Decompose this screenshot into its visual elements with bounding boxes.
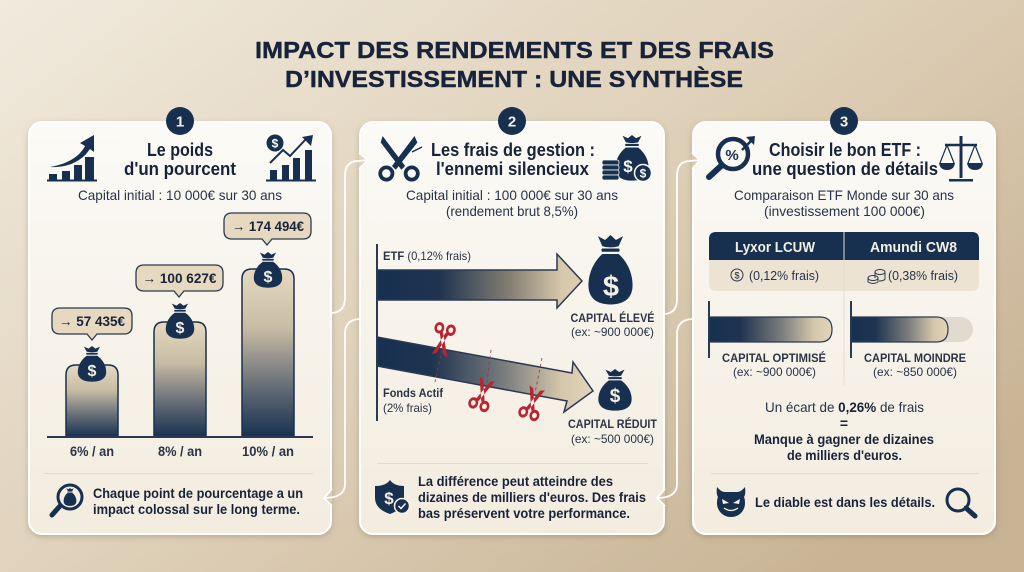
icon: money bag 6%: $ [88, 363, 97, 380]
subtitle: Comparaison ETF Monde sur 30 ans [734, 187, 954, 203]
heading [431, 140, 595, 179]
ETF result: (ex: ~900 000€) [571, 325, 654, 339]
bar 10% [242, 269, 294, 437]
subtitle [406, 187, 618, 219]
fonds actif result: (ex: ~500 000€) [571, 432, 654, 446]
heading: Les frais de gestion : [431, 140, 595, 160]
bar: capital moindre: CAPITAL MOINDRE [864, 351, 966, 365]
icon: money bag 6% [78, 346, 106, 382]
takeaway text: impact colossal sur le long terme. [93, 502, 300, 517]
callout 57 435: → 57 435€ [59, 313, 125, 329]
Fonds Actif label: Fonds Actif [383, 386, 444, 400]
bar: capital moindre: (ex: ~850 000€) [873, 365, 957, 379]
callout 100 627 [136, 265, 223, 297]
panel: le poids d'un pourcent [29, 107, 331, 534]
takeaway text: La différence peut atteindre des [418, 474, 613, 489]
connector: panel 2 bottom to panel 3 [657, 319, 692, 498]
takeaway text: bas préservent votre performance. [418, 506, 630, 521]
connector arrows between panels [324, 153, 700, 506]
icon: growth chart with dollar: $ [272, 136, 279, 150]
callout 174 494 [224, 213, 311, 245]
subtitle [734, 187, 954, 219]
bar 6% [66, 365, 118, 437]
icon: small money bag: $ [610, 386, 621, 407]
connector: panel 2 to panel 3 top [665, 160, 700, 314]
fee: Lyxor: $ [734, 270, 740, 280]
conclusion text: Un écart de 0,26% de frais [765, 399, 924, 415]
takeaway text [93, 486, 303, 517]
axis [47, 436, 313, 438]
bar labels [70, 443, 294, 459]
icon: small money bag [598, 369, 632, 411]
header: Lyxor: Lyxor LCUW [735, 240, 815, 256]
table fee row [709, 260, 979, 291]
title: D’INVESTISSEMENT : UNE SYNTHÈSE [285, 65, 743, 92]
icon: scissors [380, 136, 422, 180]
bar: capital moindre [850, 301, 973, 379]
heading: Choisir le bon ETF : [769, 140, 921, 160]
bar labels: 6% / an [70, 443, 114, 459]
heading [752, 140, 938, 179]
fonds actif result: CAPITAL RÉDUIT [568, 416, 658, 431]
icon: magnifier with percent: % [725, 147, 739, 164]
conclusion text: Manque à gagner de dizaines [754, 431, 934, 447]
fee: Lyxor: (0,12% frais) [749, 268, 819, 283]
connector: panel 1 to panel 2 top [332, 160, 368, 313]
heading: l'ennemi silencieux [436, 159, 589, 179]
notch: panel 2 top [359, 153, 368, 169]
ETF result: CAPITAL ÉLEVÉ [570, 310, 654, 325]
cut marks [435, 350, 542, 393]
step badge 3 [830, 107, 858, 135]
header: Amundi: Amundi CW8 [870, 240, 957, 256]
ETF result [570, 310, 654, 339]
heading: Le poids [147, 140, 213, 160]
icon: magnifier with money bag [52, 485, 82, 515]
bar chart [47, 213, 313, 459]
title: IMPACT DES RENDEMENTS ET DES FRAIS [255, 37, 774, 63]
panel: choisir le bon ETF [693, 107, 995, 534]
step badge 3: 3 [840, 114, 848, 130]
icon: devil [717, 487, 745, 517]
ETF label: ETF (0,12% frais) [383, 249, 471, 263]
subtitle: (investissement 100 000€) [764, 203, 925, 219]
icon: money bag 8% [166, 303, 194, 339]
bar 8% [154, 322, 206, 437]
icon: money bag with coins: $ [623, 157, 633, 176]
takeaway text: dizaines de milliers d'euros. Des frais [418, 490, 646, 505]
Fonds Actif label [383, 386, 444, 415]
step badge 1 [166, 107, 194, 135]
icon: red scissors 2 [468, 376, 496, 412]
notch: panel 3 top [692, 153, 700, 169]
Fonds Actif label: (2% frais) [383, 401, 432, 415]
icon: money bag 10%: $ [264, 269, 273, 286]
takeaway text: Chaque point de pourcentage a un [93, 486, 303, 501]
heading [124, 140, 236, 179]
icon: rising bars with arrow [47, 135, 97, 182]
icon: money bag with coins [602, 135, 652, 182]
title [255, 37, 774, 92]
icon: red scissors 1 [430, 323, 455, 358]
fee comparison chart [376, 235, 658, 446]
icon: scales [939, 136, 983, 182]
icon: large money bag: $ [603, 271, 619, 303]
conclusion text: = [840, 415, 848, 431]
takeaway text: Le diable est dans les détails. [755, 494, 935, 510]
icon: magnifier with percent [709, 136, 755, 177]
takeaway text [418, 474, 646, 521]
connector: panel 1 bottom to panel 2 [324, 319, 359, 498]
panel 3 card [693, 122, 995, 534]
callout 174 494: → 174 494€ [232, 218, 304, 234]
icon: magnifier [947, 489, 975, 516]
conclusion text: de milliers d'euros. [787, 447, 902, 463]
arrow: fonds actif [377, 337, 593, 412]
panel: les frais de gestion [360, 107, 664, 534]
fee: Amundi: (0,38% frais) [888, 268, 958, 283]
bar: capital optimisé: CAPITAL OPTIMISÉ [722, 350, 826, 365]
heading: une question de détails [752, 159, 938, 179]
callout 57 435 [52, 308, 132, 340]
arrow: ETF [377, 254, 582, 308]
icon: money bag 8%: $ [176, 320, 185, 337]
icon: money bag with coins: $ [640, 166, 647, 180]
icon: shield with dollar: $ [384, 489, 394, 508]
icon: shield with dollar [375, 480, 410, 514]
table header [709, 232, 979, 260]
fonds actif result [568, 416, 658, 446]
bar: capital optimisé [708, 301, 832, 379]
step badge 2: 2 [508, 114, 516, 130]
icon: money bag 10% [254, 252, 282, 288]
panel 2 card [360, 122, 664, 534]
conclusion text [754, 399, 934, 463]
notch: panel 2 bottom [657, 489, 665, 506]
subtitle: Capital initial : 10 000€ sur 30 ans [78, 187, 282, 203]
notch: panel 1 bottom [324, 489, 332, 506]
icon: large money bag [588, 235, 633, 304]
panel 1 card [29, 122, 331, 534]
subtitle: Capital initial : 100 000€ sur 30 ans [406, 187, 618, 203]
bar labels: 10% / an [242, 443, 294, 459]
step badge 1: 1 [176, 114, 184, 130]
subtitle: (rendement brut 8,5%) [446, 203, 578, 219]
icon: growth chart with dollar [266, 134, 316, 182]
heading: d'un pourcent [124, 159, 236, 179]
bar labels: 8% / an [158, 443, 202, 459]
comparison table [709, 232, 979, 291]
icon: red scissors 3 [518, 385, 546, 421]
bar: capital optimisé: (ex: ~900 000€) [733, 365, 816, 379]
callout 100 627: → 100 627€ [142, 270, 217, 286]
step badge 2 [498, 107, 526, 135]
axis [376, 244, 378, 421]
